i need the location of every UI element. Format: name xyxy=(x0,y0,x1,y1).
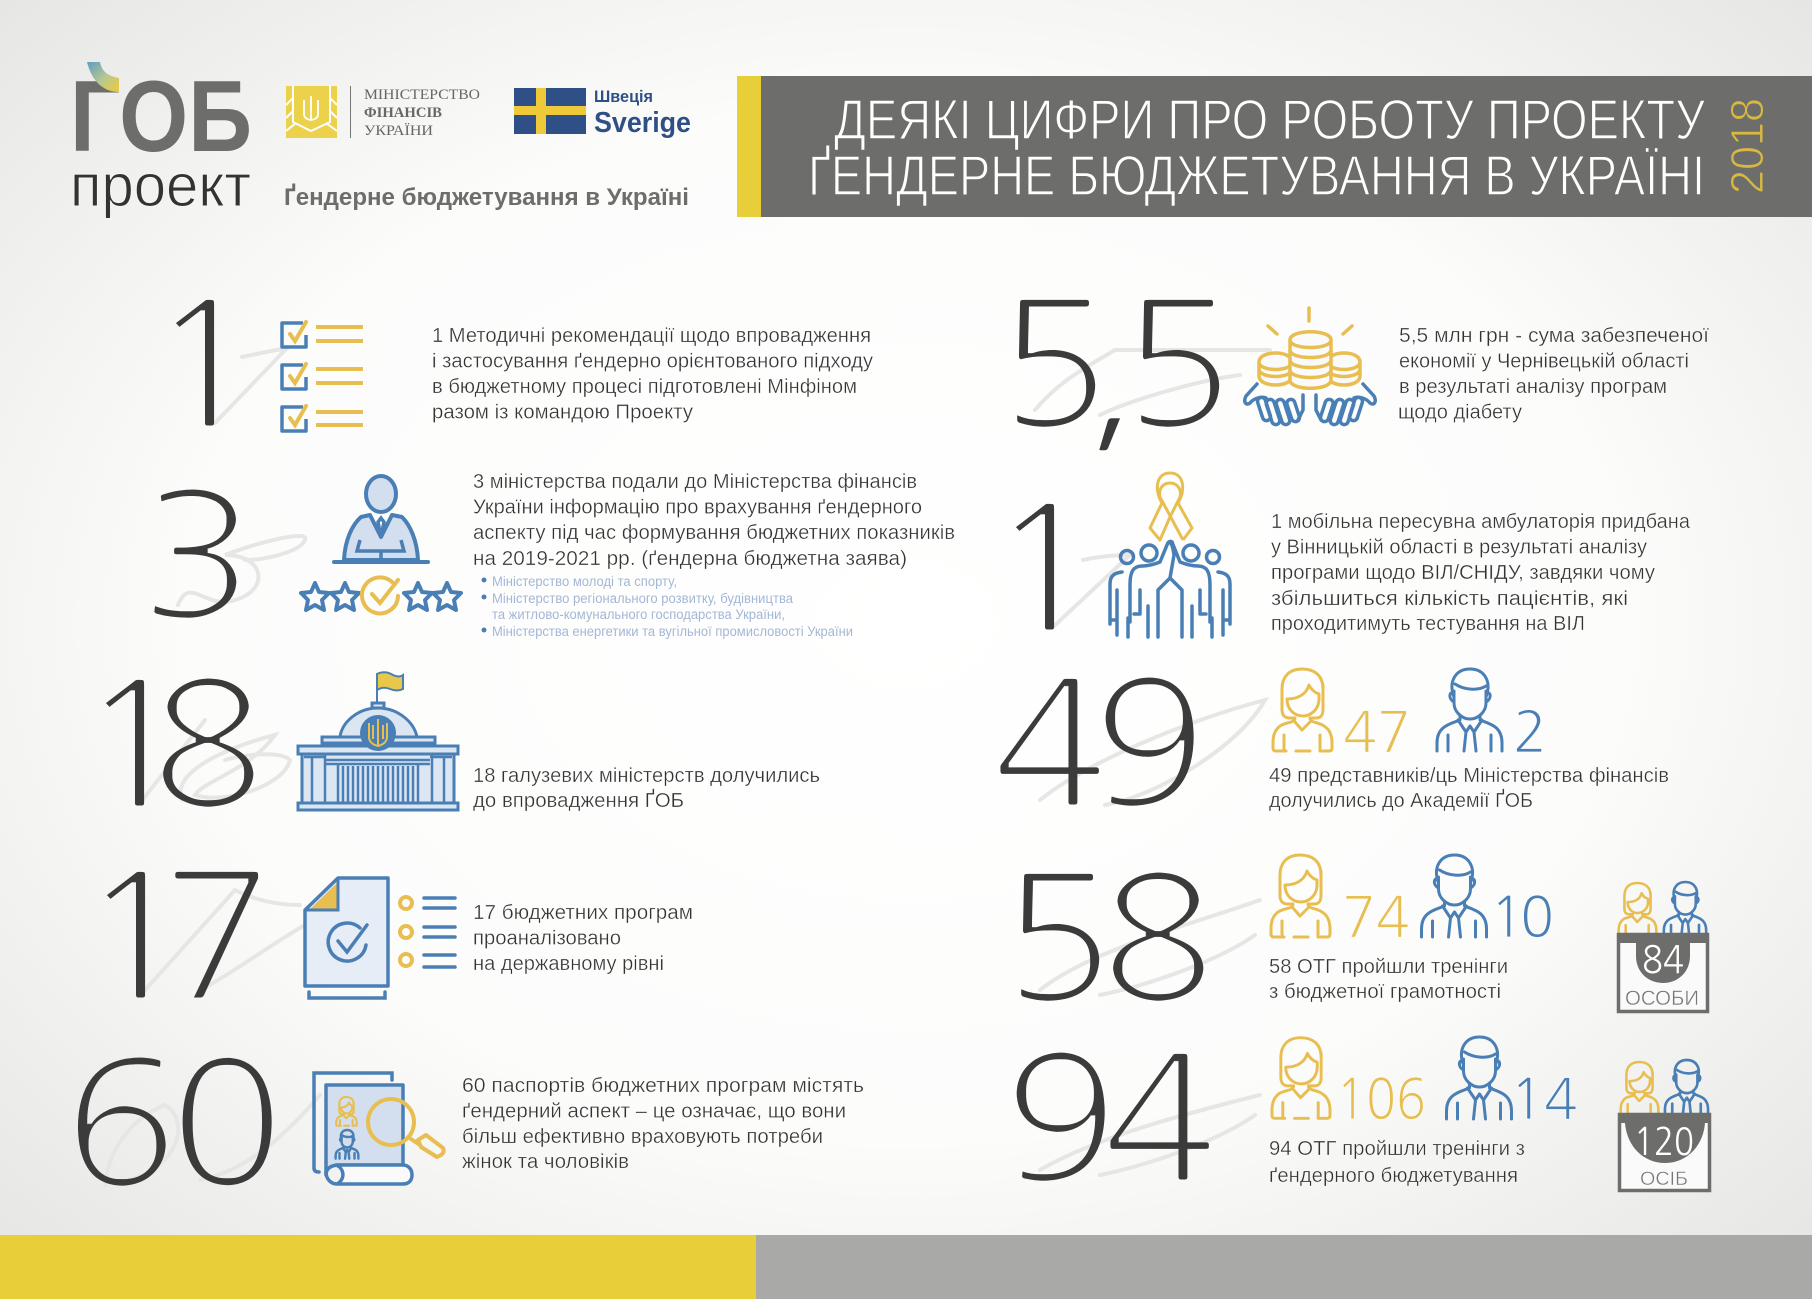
list of ministries: та житлово-комунального господарства України, xyxy=(492,607,785,622)
women count: 47 xyxy=(1343,705,1411,761)
logo: Міністерство фінансів України: ФІНАНСІВ xyxy=(364,105,442,121)
logo: Міністерство фінансів України xyxy=(286,86,484,139)
logo: ГОБ проект: проект xyxy=(70,155,251,218)
item: 18 ministries xyxy=(76,659,826,833)
text: 1 мобільна пересувна амбулаторія придбана xyxy=(1271,511,1691,533)
text: жінок та чоловіків xyxy=(462,1151,629,1173)
number 58: 58 xyxy=(1000,853,1215,1027)
text: на 2019-2021 рр. (ґендерна бюджетна заява) xyxy=(473,548,907,570)
item: 17 budget programs xyxy=(77,851,699,1025)
total badge: 84: ОСОБИ xyxy=(1625,987,1699,1010)
number 49: 49 xyxy=(992,658,1207,832)
list of ministries: Міністерства енергетики та вугільної промисловості України xyxy=(492,624,853,639)
item: 49 representatives xyxy=(992,658,1675,832)
icon: woman xyxy=(1273,669,1332,751)
number 1: 1 xyxy=(146,279,261,453)
text: 17 бюджетних програм xyxy=(473,902,693,924)
text: з бюджетної грамотності xyxy=(1269,981,1501,1003)
icon: woman xyxy=(1272,1038,1330,1118)
text: програми щодо ВІЛ/СНІДУ, завдяки чому xyxy=(1271,562,1655,584)
list of ministries: Міністерство регіонального розвитку, будівництва xyxy=(492,591,793,606)
text: в результаті аналізу програм xyxy=(1399,376,1667,398)
footer band xyxy=(0,1235,1812,1299)
text: ґендерного бюджетування xyxy=(1269,1165,1518,1187)
item: 1 mobile clinic xyxy=(986,473,1696,657)
text: України інформацію про врахування ґендерного xyxy=(473,496,922,518)
logo: ГОБ проект: ГОБ xyxy=(70,61,252,173)
number 60: 60 xyxy=(63,1038,284,1212)
logo: ГОБ проект xyxy=(70,61,252,218)
text: ґендерний аспект – це означає, що вони xyxy=(462,1100,846,1122)
text: 1 Методичні рекомендації щодо впровадження xyxy=(432,325,871,347)
text: 18 галузевих міністерств долучились xyxy=(473,765,820,787)
icon: checklist xyxy=(282,322,363,431)
text: проходитимуть тестування на ВІЛ xyxy=(1271,613,1585,635)
text: долучились до Академії ҐОБ xyxy=(1269,789,1533,812)
number 5,5: 5,5 xyxy=(996,279,1235,453)
text: проаналізовано xyxy=(473,928,621,950)
women count: 106 xyxy=(1336,1072,1426,1128)
total badge: 84 xyxy=(1617,882,1709,1012)
icon: man xyxy=(1437,669,1502,751)
total badge: 120: 120 xyxy=(1634,1123,1694,1161)
text: економії у Чернівецькій області xyxy=(1399,350,1689,372)
text: 94 ОТГ пройшли тренінги з xyxy=(1269,1138,1525,1160)
total badge: 120 xyxy=(1618,1060,1711,1190)
women count: 74 xyxy=(1342,890,1410,946)
logo: Sweden: Sverige xyxy=(594,107,691,139)
total badge: 84: 84 xyxy=(1642,941,1684,979)
icon: coins in hands xyxy=(1245,308,1375,426)
men count: 14 xyxy=(1510,1072,1578,1128)
item: 1 methodical recommendations xyxy=(146,279,879,453)
number 94: 94 xyxy=(1003,1033,1217,1207)
text: збільшиться кількість пацієнтів, які xyxy=(1271,588,1628,610)
item: 58 communities xyxy=(1000,853,1709,1027)
text: у Вінницькій області в результаті аналізу xyxy=(1271,536,1647,558)
list of ministries xyxy=(482,574,853,639)
item: 60 passports xyxy=(63,1038,870,1212)
logo: Sweden: Швеція xyxy=(594,87,653,106)
number 3: 3 xyxy=(140,470,255,644)
icon: woman xyxy=(1271,855,1330,937)
text: в бюджетному процесі підготовлені Мінфіном xyxy=(432,376,857,398)
text: аспекту під час формування бюджетних показників xyxy=(473,522,955,544)
text: більш ефективно враховують потреби xyxy=(462,1126,823,1148)
men count: 2 xyxy=(1513,705,1547,761)
text: щодо діабету xyxy=(1398,402,1522,424)
icon: man xyxy=(1422,855,1486,937)
text: 60 паспортів бюджетних програм містять xyxy=(462,1075,864,1097)
men count: 10 xyxy=(1490,890,1554,946)
text: 49 представників/ць Міністерства фінансів xyxy=(1269,765,1669,787)
logo: Sweden xyxy=(514,87,691,139)
icon: document xyxy=(305,878,455,998)
subtitle: Ґендерне бюджетування в Україні xyxy=(284,183,689,211)
text: і застосування ґендерно орієнтованого підходу xyxy=(432,350,873,372)
icon: scroll with magnifier xyxy=(314,1073,444,1184)
text: до впровадження ҐОБ xyxy=(473,789,684,812)
text: на державному рівні xyxy=(473,953,664,975)
icon: ribbon and people xyxy=(1110,473,1230,637)
text: 3 міністерства подали до Міністерства фінансів xyxy=(473,471,917,493)
text: 5,5 млн грн - сума забезпеченої xyxy=(1399,325,1709,347)
item: 5,5 mln uah xyxy=(996,279,1715,453)
icon: parliament xyxy=(298,672,458,810)
logo: Міністерство фінансів України: УКРАЇНИ xyxy=(364,122,433,139)
item: 3 ministries xyxy=(140,470,961,644)
icon: official with stars xyxy=(301,476,461,613)
title banner xyxy=(737,76,1812,217)
text: разом із командою Проекту xyxy=(432,402,693,424)
title banner: 2018 xyxy=(1721,98,1773,194)
total badge: 120: ОСІБ xyxy=(1640,1169,1688,1190)
logo: Міністерство фінансів України: МІНІСТЕРСТВО xyxy=(364,87,480,103)
text: 58 ОТГ пройшли тренінги xyxy=(1269,956,1508,978)
icon: man xyxy=(1446,1037,1512,1119)
number 18: 18 xyxy=(76,659,265,833)
item: 94 communities xyxy=(1003,1033,1711,1207)
list of ministries: Міністерство молоді та спорту, xyxy=(492,574,677,589)
number 17: 17 xyxy=(77,851,275,1025)
number 1: 1 xyxy=(986,483,1101,657)
